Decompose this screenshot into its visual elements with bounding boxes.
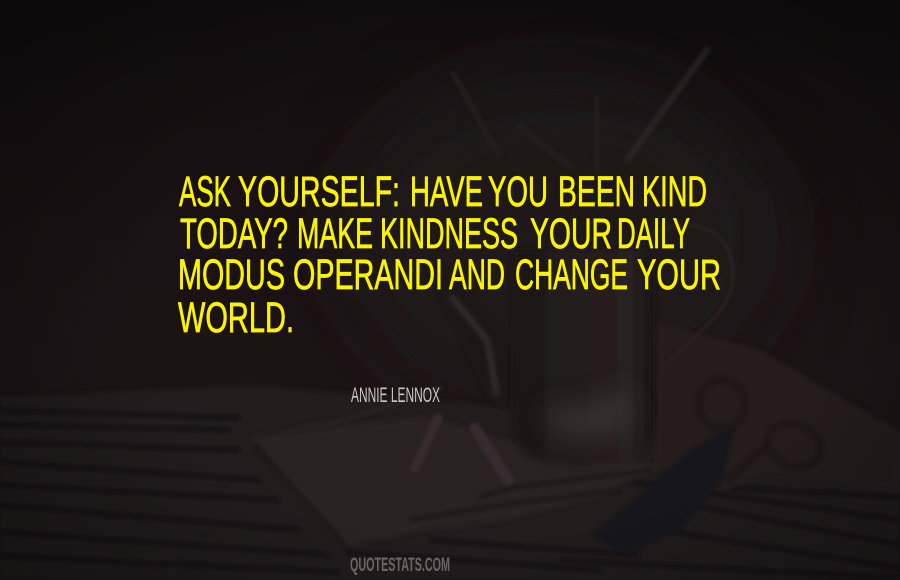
watering can — [425, 225, 733, 467]
wall glow — [340, 70, 780, 410]
can highlight — [545, 385, 630, 434]
line 2 — [180, 210, 690, 258]
line 3 — [178, 251, 721, 299]
line 2: TODAY? — [180, 210, 288, 258]
cloth folds — [255, 445, 650, 545]
line 3: AND — [449, 251, 505, 299]
line 2: DAILY — [617, 210, 690, 258]
line 1: BEEN — [558, 168, 635, 216]
line 2: MAKE — [297, 210, 373, 258]
line 3: YOUR — [637, 251, 721, 299]
line 2: YOUR — [530, 210, 612, 258]
can body — [513, 250, 653, 467]
line 1 — [179, 168, 707, 216]
scissors — [590, 380, 827, 555]
line 1: YOURSELF: — [238, 168, 400, 216]
left burlap cloth — [249, 416, 660, 546]
line 3: MODUS — [178, 251, 285, 299]
spout highlight — [450, 295, 497, 395]
lavender sprigs — [453, 50, 707, 240]
right cloth — [655, 323, 900, 493]
line 3: CHANGE — [515, 251, 628, 299]
line 4: WORLD. — [178, 294, 294, 342]
line 2: KINDNESS — [380, 210, 518, 258]
lavender on cloth — [290, 388, 508, 480]
watermark: QUOTESTATS.COM — [350, 555, 450, 576]
can spout — [425, 262, 515, 410]
scissor blades — [590, 425, 735, 555]
line 1: KIND — [642, 168, 707, 216]
line 1: YOU — [488, 168, 548, 216]
author name: ANNIE LENNOX — [351, 384, 440, 407]
line 1: ASK — [179, 168, 231, 216]
quote text — [178, 168, 721, 342]
scissor finger rings — [699, 380, 827, 480]
can handle — [650, 225, 733, 362]
wooden table — [0, 385, 900, 580]
line 3: OPERANDI — [293, 251, 443, 299]
line 1: HAVE — [410, 168, 483, 216]
